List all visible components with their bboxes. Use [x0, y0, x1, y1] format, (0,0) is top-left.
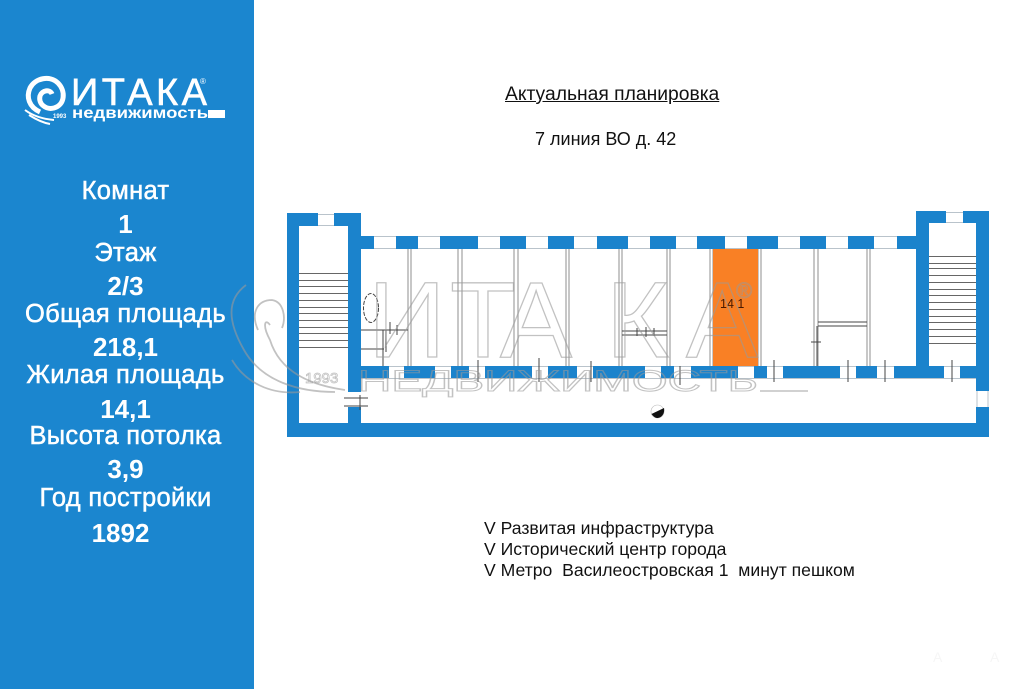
- icon: wave swirl: [25, 78, 63, 124]
- window frame lines: [318, 212, 988, 407]
- stat value: rooms: 1: [118, 209, 133, 239]
- stat value: living area: 14,1: [100, 394, 151, 424]
- logo year: 1993: [53, 114, 67, 120]
- stat label: ceiling height: Высота потолка: [29, 422, 222, 450]
- stat label: year built: Год постройки: [39, 484, 212, 512]
- stat value: year built: 1892: [92, 518, 149, 548]
- registered mark: ®: [200, 77, 206, 86]
- room partitions: [408, 249, 870, 366]
- stat label: total area: Общая площадь: [25, 300, 226, 328]
- left staircase: [299, 274, 348, 348]
- logo subtitle: недвижимость: [72, 105, 208, 122]
- watermark: [232, 259, 808, 398]
- blue walls: [287, 211, 989, 437]
- room area label: 14 1: [720, 297, 744, 311]
- watermark registered mark: ®: [736, 278, 752, 303]
- watermark year: 1993: [305, 370, 338, 387]
- watermark swirl: [232, 285, 345, 392]
- highlighted room: [713, 249, 758, 366]
- icon: round flue: [651, 405, 664, 418]
- address: 7 линия ВО д. 42: [535, 129, 676, 149]
- faint corner watermarks: [933, 649, 1000, 665]
- watermark end bar: [760, 390, 808, 392]
- feature: historic centre: V Исторический центр города: [484, 539, 726, 559]
- logo: Itaka real estate: [24, 72, 225, 125]
- stat value: ceiling height: 3,9: [107, 454, 144, 484]
- stat value: total area: 218,1: [93, 332, 158, 362]
- panel: sidebar: [0, 0, 254, 689]
- stat value: floor: 2/3: [107, 271, 144, 301]
- feature: infrastructure: V Развитая инфраструктура: [484, 518, 714, 538]
- right staircase: [929, 256, 976, 344]
- logo wordmark: ИТАКА: [71, 72, 208, 114]
- stat label: living area: Жилая площадь: [26, 361, 225, 389]
- faint corner watermarks: А: [990, 649, 1000, 665]
- bathroom fixture and door details: [344, 294, 952, 410]
- watermark subtitle: НЕДВИЖИМОСТЬ: [358, 365, 758, 398]
- logo end bar: [208, 110, 225, 118]
- faint corner watermarks: А: [933, 649, 943, 665]
- feature list: [484, 518, 855, 580]
- watermark wordmark: ИТАКА: [368, 259, 758, 380]
- stat label: rooms: Комнат: [82, 177, 169, 205]
- stat label: floor: Этаж: [94, 239, 157, 267]
- heading: current layout: Актуальная планировка: [505, 84, 719, 105]
- feature: metro: V Метро Василеостровская 1 минут пешком: [484, 560, 855, 580]
